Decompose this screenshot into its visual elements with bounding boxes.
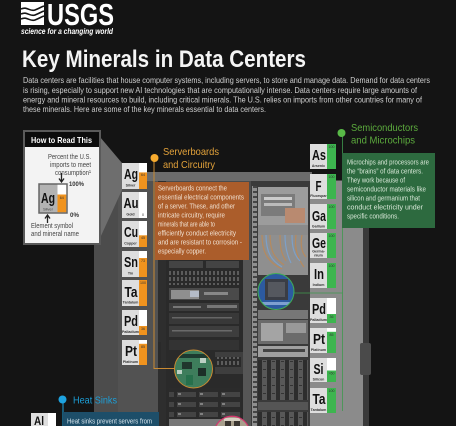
mineral cards: serverboards: Platinum — [123, 360, 138, 364]
panel: how to read this: How to Read This — [31, 135, 92, 145]
mineral cards: semiconductors: Ge — [312, 235, 326, 252]
mineral cards: serverboards: Silver — [126, 184, 136, 188]
mineral cards: serverboards: Cu — [124, 224, 138, 241]
mineral cards: serverboards: Sn — [124, 254, 138, 271]
title: Key Minerals in Data Centers — [22, 46, 306, 73]
panel: how to read this: 100% — [69, 181, 84, 188]
mineral cards: serverboards: Copper — [124, 242, 137, 246]
panel: semiconductors text: the “brains” of data centers. — [347, 166, 423, 176]
panel: how to read this: consumption¹ — [55, 170, 92, 177]
mineral cards: semiconductors: In — [314, 266, 324, 283]
mineral cards: semiconductors: Gallium — [312, 224, 325, 228]
mineral cards: semiconductors: Si — [314, 361, 324, 378]
panel: serverboards text: and are resistant to corrosion - — [158, 238, 242, 246]
mineral cards: semiconductors: Platinum — [311, 348, 326, 352]
panel: serverboards text — [155, 182, 249, 260]
panel: how to read this — [24, 131, 100, 244]
panel: how to read this: Ag — [41, 190, 55, 207]
panel: semiconductors text — [342, 153, 435, 228]
icon: microchip circle — [258, 273, 294, 311]
left server bay — [166, 255, 244, 426]
heading: serverboards and circuitry: Serverboards — [163, 146, 219, 158]
panel: how to read this: 64 — [60, 196, 64, 200]
panel: how to read this: and mineral name — [31, 231, 79, 238]
mineral cards: serverboards: 100 — [140, 281, 146, 285]
mineral cards: semiconductors: 100 — [328, 205, 334, 209]
panel: how to read this: Silver — [43, 206, 54, 212]
mineral cards: serverboards: Gold — [126, 212, 135, 216]
mineral cards: semiconductors: nium — [314, 254, 323, 258]
panel: serverboards text: of a server. These, and other — [158, 202, 235, 210]
mineral cards: serverboards: Ag — [124, 166, 138, 183]
mineral cards: serverboards: 36 — [141, 327, 145, 331]
panel: semiconductors text: silicon and germanium that — [347, 194, 421, 202]
panel: semiconductors text: specific conditions. — [347, 212, 399, 220]
heading: heat sinks: Heat Sinks — [73, 394, 117, 406]
serverboards connector line — [154, 158, 176, 368]
mineral cards: semiconductors: 85 — [330, 333, 334, 337]
panel: serverboards text: especially copper. — [158, 246, 206, 256]
icon: orange marker dot — [150, 154, 158, 162]
panel: semiconductors text: semiconductor materials like — [347, 184, 426, 194]
panel: semiconductors text: Microchips and processors are — [347, 158, 429, 166]
mineral cards: serverboards: Pt — [125, 343, 137, 360]
mineral cards: semiconductors: Pd — [312, 301, 326, 318]
mineral cards: semiconductors: F — [316, 178, 322, 195]
panel: semiconductors text: conduct electricity under — [347, 202, 423, 212]
heading: serverboards and circuitry — [163, 146, 219, 171]
mineral cards: semiconductors: 100 — [328, 264, 334, 268]
panel: how to read this: 0% — [70, 212, 79, 219]
panel: semiconductors text: They work because of — [347, 176, 406, 184]
server rack — [94, 172, 371, 426]
mineral cards: serverboards — [122, 163, 147, 365]
mineral cards: serverboards: 45 — [141, 236, 145, 240]
mineral cards: semiconductors: Indium — [313, 283, 324, 287]
mineral cards: semiconductors: Silicon — [313, 378, 324, 382]
mineral cards: semiconductors: 36 — [330, 315, 334, 319]
semiconductors connector line — [294, 133, 342, 411]
mineral cards: serverboards: Pd — [124, 313, 138, 330]
panel: serverboards text: Serverboards connect the — [158, 184, 227, 192]
heat sinks connector line — [62, 400, 64, 426]
how-to-read connector — [100, 137, 122, 238]
panel: serverboards text: essential electrical components — [158, 192, 244, 202]
mineral cards: serverboards: 85 — [141, 345, 145, 349]
intro text — [23, 75, 430, 114]
mineral cards: serverboards: Tantalum — [123, 300, 138, 304]
mineral cards: serverboards: Ta — [124, 284, 138, 301]
heading: semiconductors and microchips — [351, 122, 418, 146]
panel: serverboards text: minerals that are able to — [158, 220, 215, 228]
mineral cards: semiconductors: Arsenic — [312, 164, 325, 168]
heading: serverboards and circuitry: and Circuitry — [163, 159, 216, 171]
mineral cards: semiconductors: Ta — [312, 391, 326, 408]
mineral cards: serverboards: 73 — [141, 259, 145, 263]
mineral cards: semiconductors: Tantalum — [311, 408, 326, 412]
mineral cards: serverboards: Palladium — [122, 330, 139, 334]
right server bay — [251, 181, 310, 426]
panel: how to read this: imports to meet — [50, 162, 91, 169]
heading: semiconductors and microchips: Semiconductors — [351, 122, 418, 134]
mineral cards: semiconductors — [310, 144, 336, 413]
icon: heat sink circle — [216, 416, 248, 426]
panel: serverboards text: intricate circuitry, require — [158, 210, 225, 220]
mineral cards: semiconductors: Pt — [313, 331, 325, 348]
mineral cards: serverboards: Tin — [128, 272, 133, 276]
USGS logo — [21, 0, 114, 36]
mineral cards: semiconductors: >50 — [328, 372, 335, 376]
mineral card: aluminum — [31, 413, 56, 426]
icon: blue marker dot — [58, 396, 66, 404]
icon: green marker dot — [338, 129, 346, 137]
mineral cards: semiconductors: 100 — [328, 234, 334, 238]
mineral cards: semiconductors: Fluorspar — [310, 194, 327, 198]
mineral cards: serverboards: Au — [124, 195, 138, 212]
panel: heat sinks text: Heat sinks prevent servers from — [67, 416, 152, 426]
center post — [243, 260, 251, 426]
icon: circuit board circle — [174, 350, 212, 388]
mineral cards: semiconductors: 100 — [328, 145, 334, 149]
USGS logo: science for a changing world — [21, 27, 114, 36]
mineral cards: semiconductors: 100 — [328, 175, 334, 179]
mineral cards: serverboards: 64 — [141, 173, 145, 177]
mineral cards: semiconductors: As — [312, 147, 326, 164]
panel: how to read this: Percent the U.S. — [48, 154, 91, 161]
panel: serverboards text: efficiently conduct electricity — [158, 228, 236, 238]
intro text: these minerals. Here are some of the key minerals essential to data centers. — [23, 104, 266, 114]
mineral cards: serverboards: 0 — [142, 213, 144, 217]
mineral cards: semiconductors: 100 — [328, 389, 334, 393]
mineral cards: semiconductors: Ga — [312, 208, 326, 225]
mineral cards: semiconductors: Palladium — [310, 318, 327, 322]
panel: heat sinks text — [63, 412, 159, 426]
panel: how to read this: Element symbol — [31, 223, 73, 230]
mineral cards: semiconductors: Germa- — [312, 250, 326, 254]
heading: semiconductors and microchips: and Microchips — [351, 134, 415, 146]
